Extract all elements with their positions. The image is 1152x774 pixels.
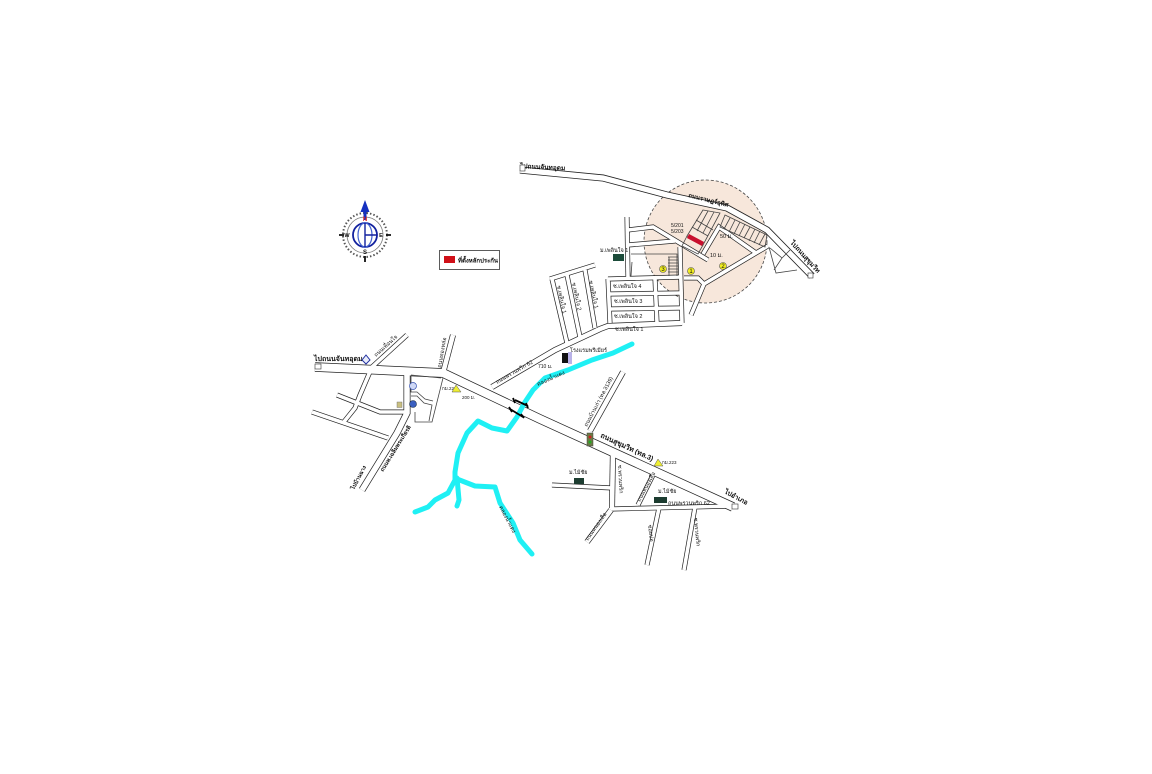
- compass: S: [363, 250, 367, 256]
- road and place labels: ไปถนนสุขุมวิท: [788, 238, 823, 275]
- road and place labels: ซ.เพลินใจ 2: [614, 313, 642, 320]
- road and place labels: คลองน้ำแดง: [497, 504, 518, 534]
- road and place labels: คลองน้ำแดง: [536, 368, 566, 388]
- road and place labels: 710 ม.: [538, 364, 552, 370]
- road and place labels: ไปอำเภอ: [722, 486, 750, 507]
- road and place labels: 200 ม.: [462, 395, 475, 400]
- road and place labels: โรงแรมพรีเมียร์: [570, 346, 607, 354]
- road and place labels: ซ.พรวนพริก: [692, 518, 701, 547]
- road and place labels: ถนนทองหล่อ: [437, 337, 448, 368]
- road and place labels: ถนนราษฎร์อุทิศ: [688, 191, 729, 209]
- river: [415, 344, 632, 554]
- map icons: [315, 165, 813, 509]
- numbered markers: 2: [721, 264, 725, 270]
- land plots near site: [631, 210, 797, 276]
- numbered markers: [660, 262, 726, 275]
- legend: [440, 250, 500, 270]
- bridge: [509, 398, 528, 418]
- road and place labels: ซ.พรวนพริก: [616, 465, 624, 494]
- road and place labels: กม.222: [442, 386, 457, 391]
- road and place labels: ซ.เพลินใจ 1: [587, 280, 600, 309]
- road and place labels: ซ.เพลินใจ 1: [615, 326, 643, 333]
- road and place labels: ถนนหนองเสือ: [584, 511, 608, 542]
- road and place labels: [313, 161, 823, 547]
- road and place labels: ซ.เพลินใจ 2: [570, 282, 583, 311]
- road and place labels: 5/203: [671, 229, 684, 235]
- road and place labels: ถนนพ.เฉลิมพระเกียรติ: [379, 424, 413, 473]
- road network: [312, 170, 812, 570]
- road and place labels: ม.ไม้ชัย: [569, 469, 588, 476]
- road and place labels: ถนนพรวนพริก 62: [494, 359, 534, 386]
- compass: W: [344, 233, 350, 239]
- road and place labels: ซ.เพลินใจ 3: [614, 298, 642, 305]
- compass: N: [363, 217, 367, 223]
- numbered markers: 1: [689, 269, 693, 275]
- road and place labels: ถนนพรวนพริก 62: [668, 500, 710, 507]
- road and place labels: ม.เพลินใจ 1: [600, 247, 628, 254]
- road and place labels: 5/201: [671, 223, 684, 229]
- road and place labels: ซ.เพลินใจ 4: [613, 283, 641, 290]
- road and place labels: ถนนหนองเสือ: [636, 471, 657, 503]
- road and place labels: ถนนบ้านเก่า (ทล.3139): [583, 376, 615, 428]
- road and place labels: 10 ม.: [710, 253, 723, 259]
- road and place labels: ซอยบ่อ: [646, 524, 655, 542]
- road and place labels: ไปบ้านฉาง: [348, 464, 368, 492]
- legend: ที่ตั้งหลักประกัน: [458, 254, 499, 264]
- compass: [339, 200, 391, 262]
- highlighted area circle: [644, 180, 767, 303]
- red site marker: [688, 236, 703, 244]
- road and place labels: 50 ม.: [720, 234, 733, 240]
- road and place labels: ถนนสุขุมวิท (ทล.3): [599, 432, 655, 463]
- road and place labels: ม.ไม้ชัย: [658, 488, 677, 495]
- road and place labels: ไปถนนจันทอุดม: [313, 354, 363, 363]
- road and place labels: กม.223: [662, 460, 677, 465]
- road and place labels: ถนนเพื่อนใจ: [372, 333, 399, 358]
- compass: E: [379, 233, 383, 239]
- road and place labels: ไปถนนจันทอุดม: [519, 161, 565, 172]
- road and place labels: ซ.เพลินใจ 1: [555, 285, 568, 314]
- numbered markers: 3: [661, 267, 665, 273]
- neighbourhood block west: [411, 375, 443, 422]
